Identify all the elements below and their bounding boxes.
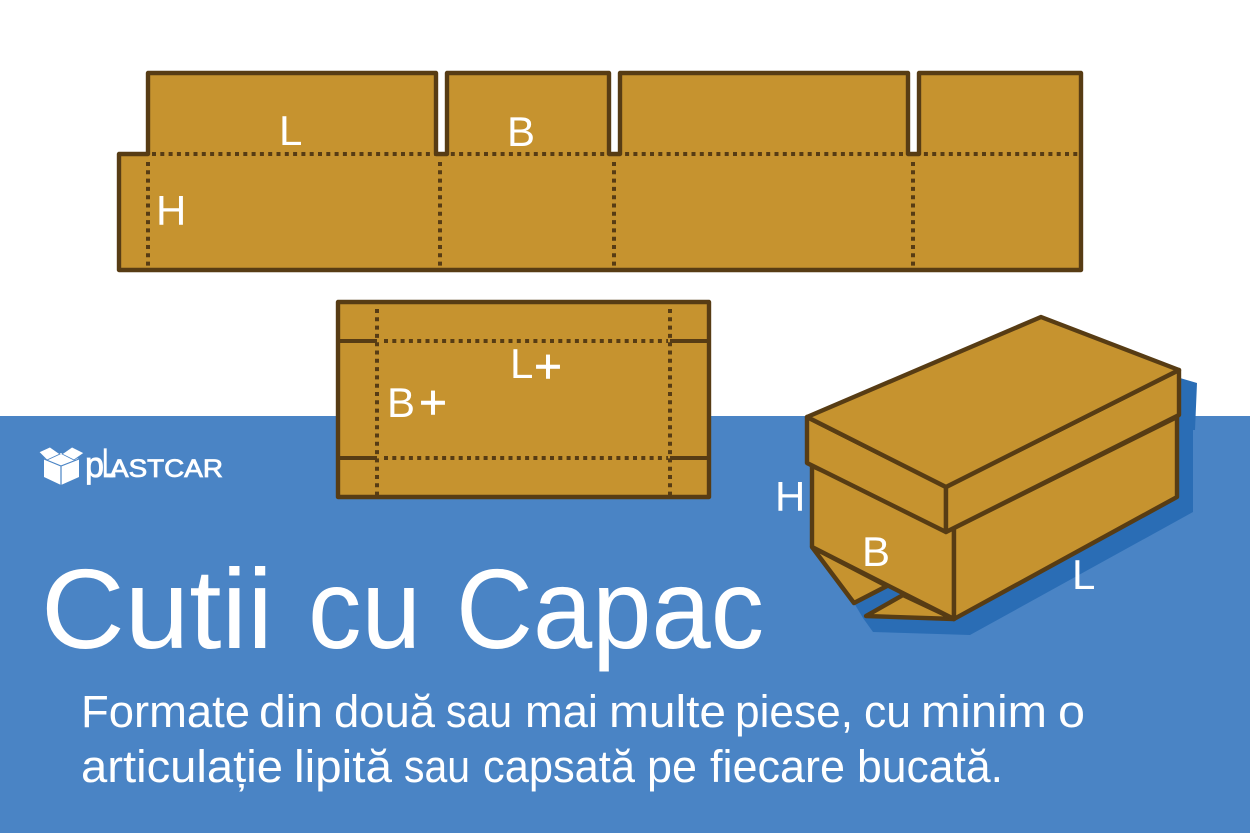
description text: o: [1058, 686, 1085, 737]
description text: capsată: [483, 741, 636, 792]
label: L+: [510, 340, 562, 394]
label: B+: [387, 377, 447, 430]
label: L: L: [1072, 551, 1095, 598]
logo wordmark: L: [102, 440, 116, 486]
panel: lid flat pattern: [338, 302, 709, 497]
box front and side: [812, 466, 954, 619]
panel: box base flat pattern: [119, 73, 1081, 270]
description text: sau: [446, 686, 512, 737]
label: L+: +: [534, 341, 562, 394]
logo wordmark: ASTCAR: [110, 455, 223, 483]
description text: bucată.: [857, 741, 1003, 792]
description text: mai: [525, 686, 598, 737]
description text: articulație: [81, 741, 283, 792]
description text: fiecare: [710, 741, 845, 792]
label: L+: L: [510, 340, 533, 387]
label: L: L: [279, 107, 302, 154]
bottom flaps: [812, 547, 954, 619]
description text: două: [334, 686, 436, 737]
icon: open box: [39, 447, 84, 485]
label: H: H: [156, 187, 186, 234]
box shadow: [812, 378, 1197, 635]
logo wordmark: [85, 440, 223, 486]
title: Capac: [456, 546, 764, 672]
description text: multe: [609, 686, 726, 737]
description text: cu: [864, 686, 911, 737]
title: cu: [308, 546, 421, 672]
description text: [81, 686, 1085, 792]
description text: pe: [647, 741, 697, 792]
description text: sau: [404, 741, 470, 792]
label: B: B: [862, 528, 890, 575]
label: B+: +: [419, 377, 447, 430]
title: Cutii: [41, 546, 273, 672]
description text: Formate: [81, 686, 250, 737]
logo: plastcar: [39, 440, 223, 486]
label: B: B: [507, 108, 535, 155]
description text: din: [259, 686, 323, 737]
lid: [807, 317, 1179, 532]
description text: lipită: [294, 741, 393, 792]
description text: minim: [921, 686, 1047, 737]
label: B+: B: [387, 379, 415, 426]
logo wordmark: p: [85, 444, 104, 485]
icon: assembled box with lid: [775, 317, 1197, 635]
label: H: H: [775, 473, 805, 520]
blue background band: [0, 416, 1250, 833]
title: [41, 546, 764, 672]
description text: piese,: [735, 686, 853, 737]
